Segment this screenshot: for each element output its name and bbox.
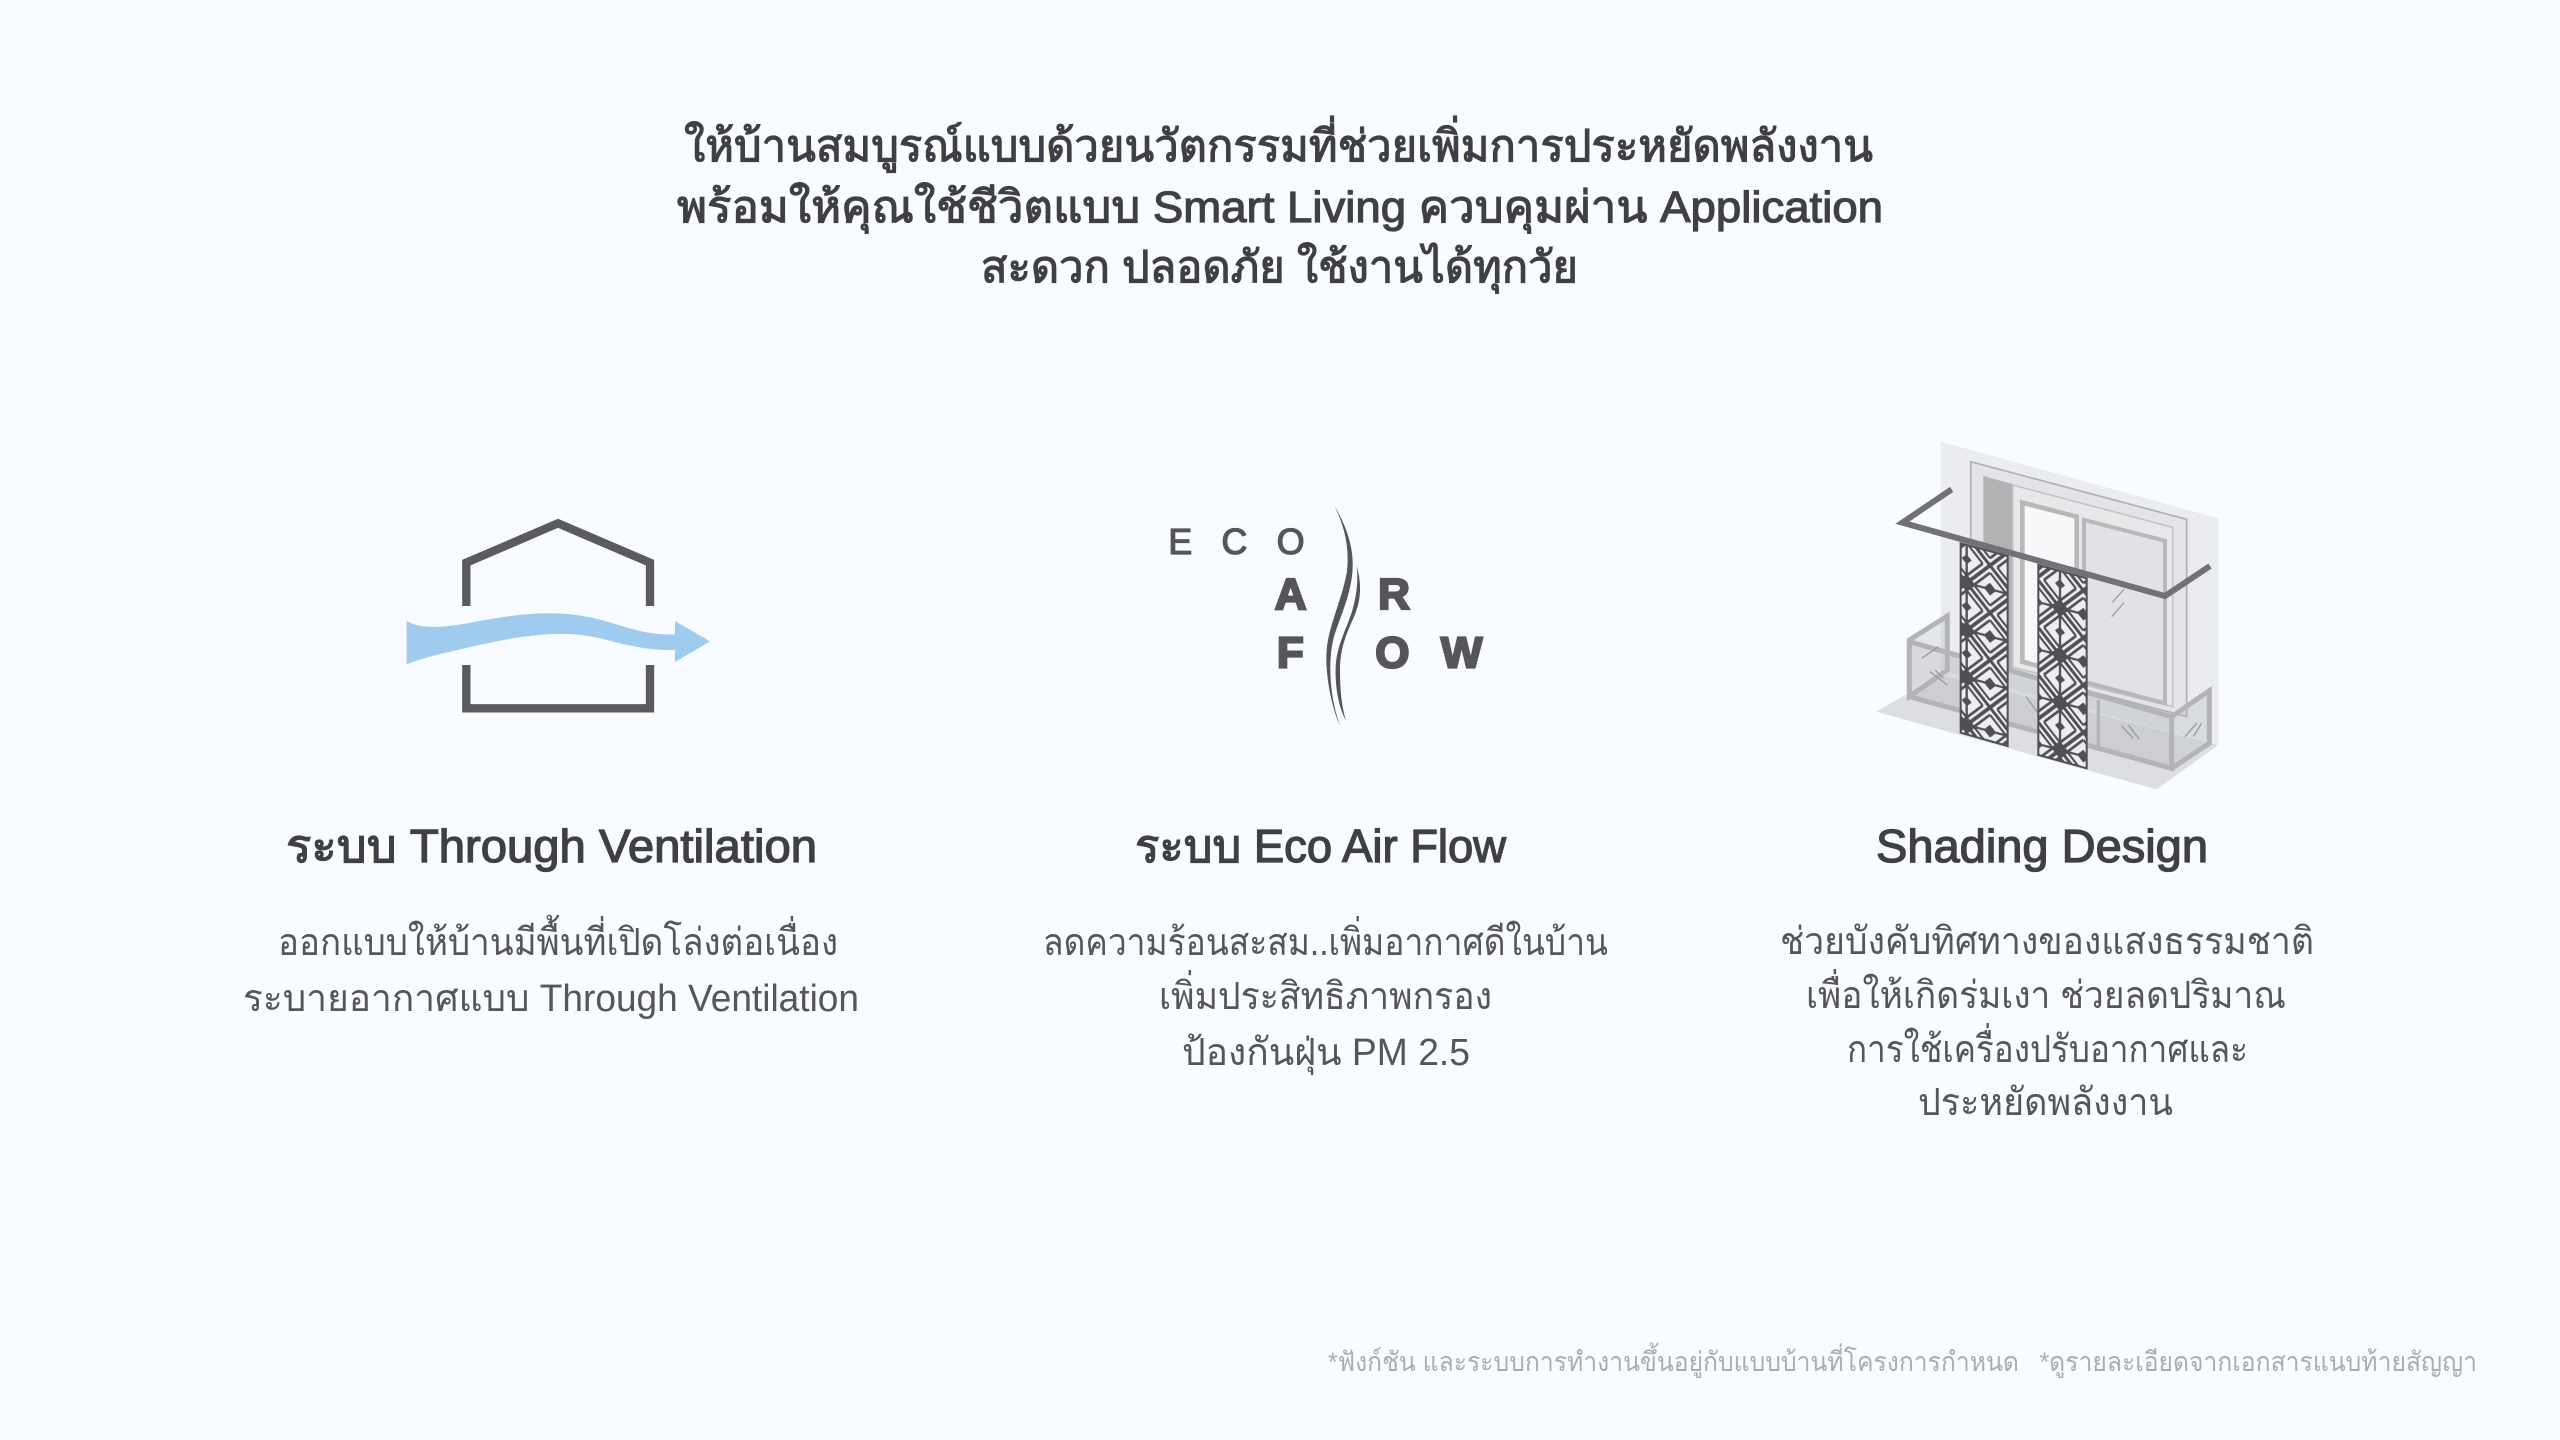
icon: Eco Air Flow logo: C (1221, 522, 1247, 562)
title: สะดวก ปลอดภัย ใช้งานได้ทุกวัย (981, 242, 1578, 294)
icon: Eco Air Flow logo: W (1441, 628, 1483, 677)
heading: Eco Air Flow: ระบบ Eco Air Flow (1135, 820, 1507, 872)
icon: Eco Air Flow logo (1168, 505, 1483, 726)
title: ให้บ้านสมบูรณ์แบบด้วยนวัตกรรมที่ช่วยเพิ่มการประหยัดพลังงาน (684, 115, 1873, 173)
text block: Through Ventilation description: ระบายอากาศแบบ Through Ventilation (243, 978, 859, 1020)
text block: Shading Design description: ประหยัดพลังงาน (1918, 1082, 2173, 1124)
title: พร้อมให้คุณใช้ชีวิตแบบ Smart Living ควบคุมผ่าน Application (677, 182, 1883, 234)
icon: Eco Air Flow logo: E (1168, 522, 1192, 562)
text block: Eco Air Flow description: ลดความร้อนสะสม..เพิ่มอากาศดีในบ้าน (1043, 916, 1608, 964)
panel: Shading Design (1780, 442, 2314, 1124)
heading: Through Ventilation: ระบบ Through Ventilation (286, 820, 817, 872)
text block: Shading Design description (1780, 921, 2314, 1124)
text block: Shading Design description: การใช้เครื่องปรับอากาศและ (1847, 1023, 2248, 1071)
icon: house with airflow arrow (407, 523, 710, 708)
text block: Through Ventilation description: ออกแบบให้บ้านมีพื้นที่เปิดโล่งต่อเนื่อง (278, 914, 838, 964)
text block: Eco Air Flow description: ป้องกันฝุ่น PM 2.5 (1182, 1032, 1470, 1075)
panel: Through Ventilation (243, 523, 859, 1020)
panel: Eco Air Flow (1043, 505, 1608, 1075)
icon: Eco Air Flow logo: F (1277, 628, 1304, 677)
icon: Eco Air Flow logo: A (1275, 570, 1307, 619)
footnote: *ฟังก์ชัน และระบบการทำงานขึ้นอยู่กับแบบบ้านที่โครงการกำหนด *ดูรายละเอียดจากเอกสารแนบท้ายสัญญา (1328, 1342, 2477, 1378)
title (677, 115, 1883, 294)
text block: Through Ventilation description (243, 914, 859, 1020)
heading: Shading Design: Shading Design (1876, 820, 2208, 872)
icon: Eco Air Flow logo: O (1277, 522, 1305, 562)
text block: Shading Design description: ช่วยบังคับทิศทางของแสงธรรมชาติ (1780, 921, 2314, 963)
icon: Eco Air Flow logo: R (1378, 570, 1410, 619)
text block: Eco Air Flow description (1043, 916, 1608, 1075)
text block: Shading Design description: เพื่อให้เกิดร่มเงา ช่วยลดปริมาณ (1806, 969, 2286, 1017)
text block: Eco Air Flow description: เพิ่มประสิทธิภาพกรอง (1159, 970, 1492, 1018)
icon: balcony with shading panels (1876, 442, 2218, 789)
icon: Eco Air Flow logo: O (1375, 628, 1409, 677)
